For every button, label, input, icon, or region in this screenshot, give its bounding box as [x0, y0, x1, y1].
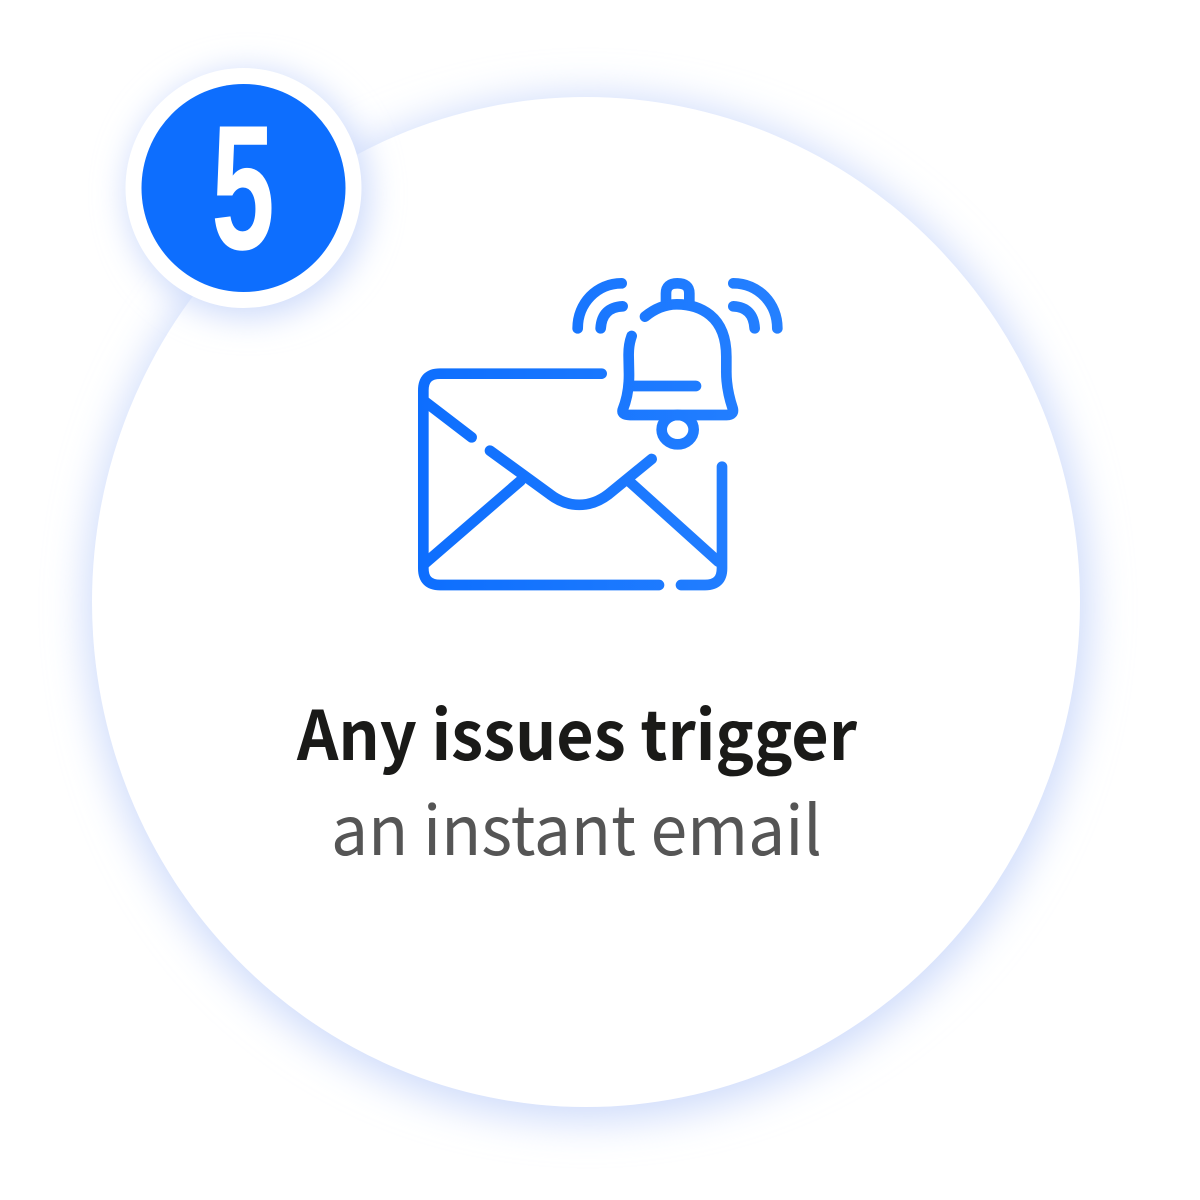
subheading: an instant email	[331, 776, 822, 875]
number badge	[126, 68, 370, 318]
icon: envelope with ringing bell	[423, 283, 777, 585]
number badge: 5	[211, 88, 275, 287]
icon: bell	[623, 283, 733, 444]
icon: envelope	[423, 374, 722, 585]
panel: main circle	[86, 95, 1090, 1121]
heading: Any issues trigger	[296, 681, 857, 780]
icon: ringing waves	[578, 283, 777, 328]
